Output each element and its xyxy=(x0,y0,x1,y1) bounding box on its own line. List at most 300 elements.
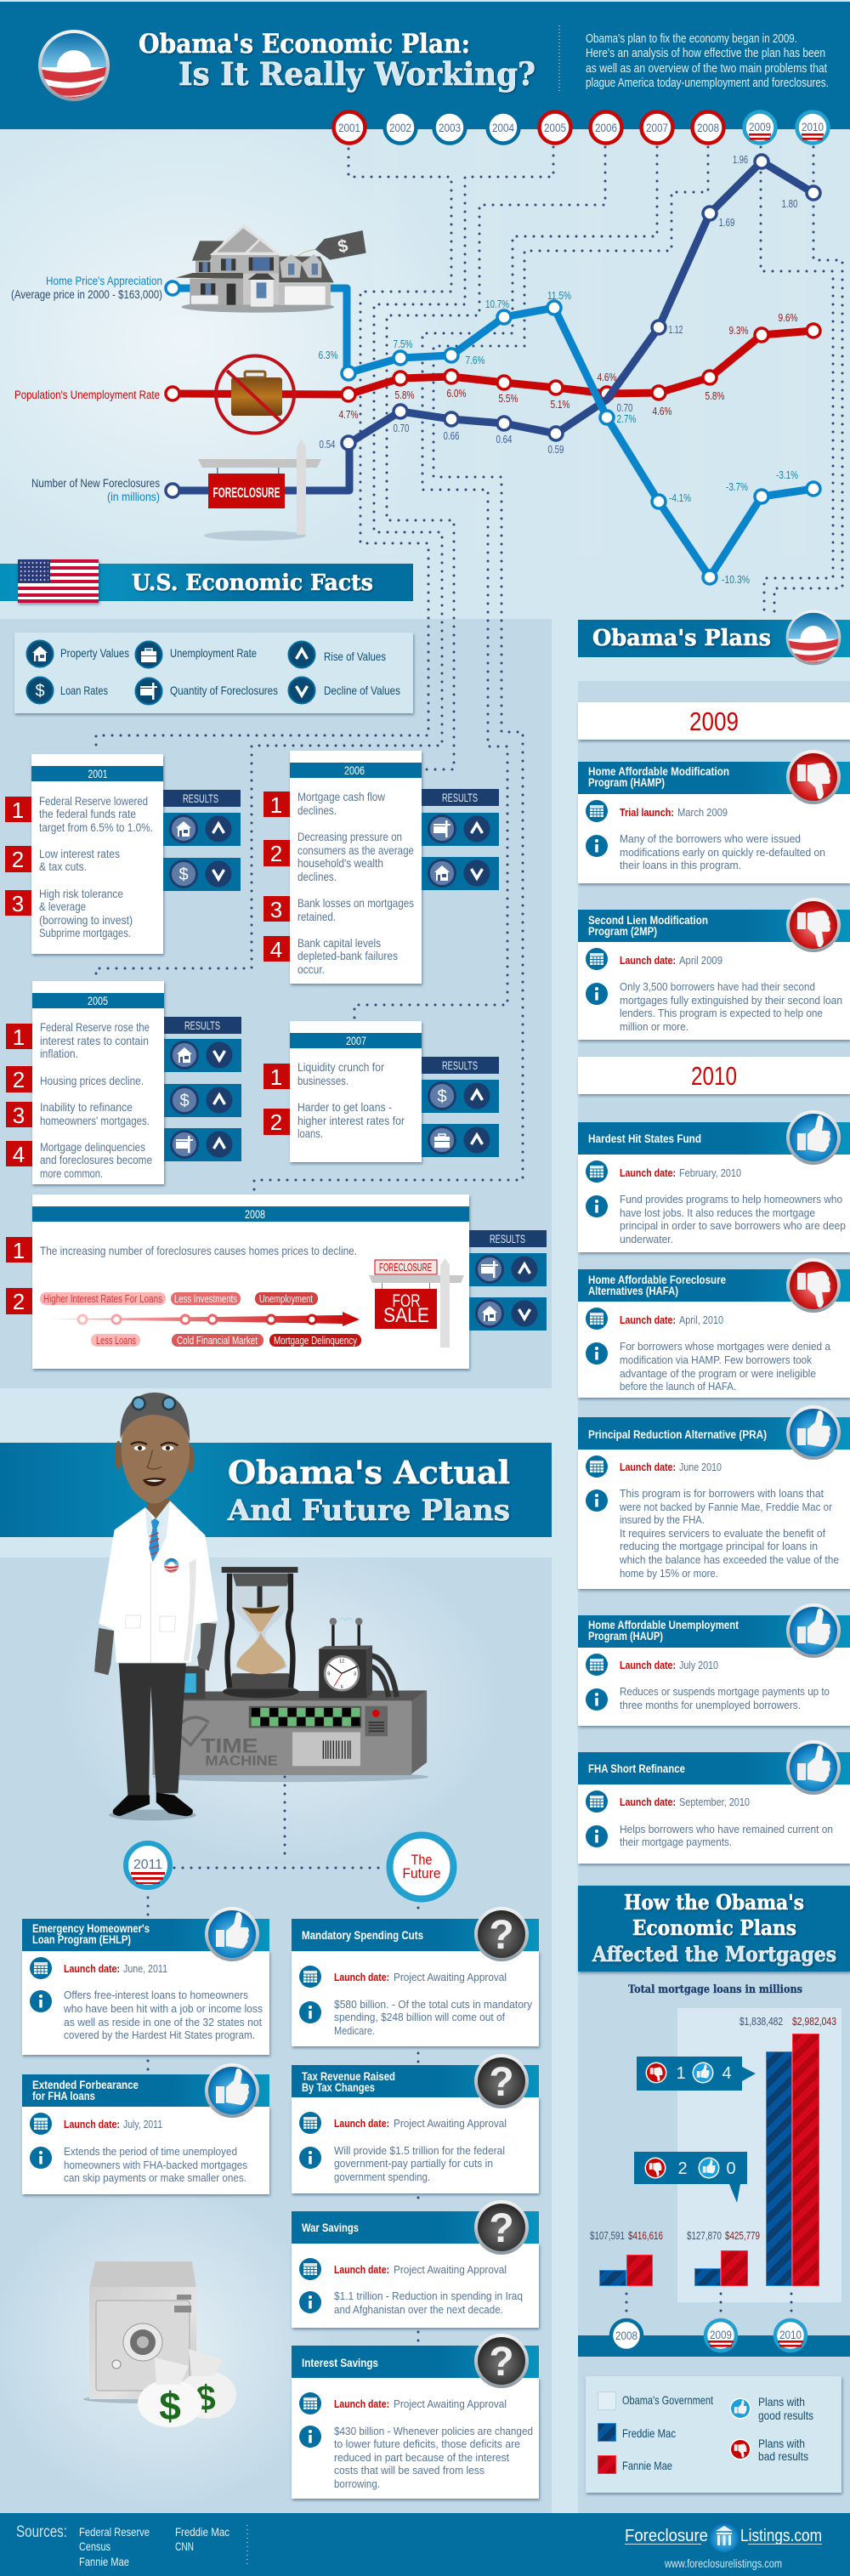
plan card: EHLP: Offers free-interest loans to homeowners xyxy=(64,1989,248,2001)
card: 2005: 4 xyxy=(13,1142,25,1167)
plan card: 2MP: million or more. xyxy=(620,1020,688,1033)
legend: mortgages chart xyxy=(586,2376,842,2493)
plan card: HAMP: Program (HAMP) xyxy=(588,776,665,789)
chart axis xyxy=(578,2320,850,2357)
card: 2006: household's wealth xyxy=(298,856,383,870)
illustration: foreclosure sign: FORECLOSURE xyxy=(212,485,280,501)
plan card: 2MP: Program (2MP) xyxy=(588,925,657,938)
heading: How the Obama's Economic Plans Affected the Mortgages: Economic Plans xyxy=(632,1915,796,1940)
results: 2008 xyxy=(469,1230,547,1331)
plan card: War Savings xyxy=(292,2200,539,2328)
plan card: HAUP: Program (HAUP) xyxy=(588,1630,663,1643)
callout: 2010 plan results: 1 xyxy=(676,2064,686,2083)
plan card: Mandatory Spending Cuts: Mandatory Spending Cuts xyxy=(302,1929,423,1942)
card: 2007: businesses. xyxy=(298,1074,348,1087)
bars: 2010: $1,838,482 xyxy=(740,2015,783,2028)
sources: Sources: xyxy=(16,2523,67,2541)
year markers: 2008 xyxy=(697,121,719,134)
card: 2006: Decreasing pressure on xyxy=(298,830,402,843)
plan card: War Savings: $1.1 trillion - Reduction in spending in Iraq xyxy=(334,2289,523,2302)
plan card: HAFA: Home Affordable Foreclosure xyxy=(588,1274,726,1286)
heading: Obama's Actual And Future Plans: And Future Plans xyxy=(227,1494,510,1528)
results: 2007 xyxy=(422,1057,499,1157)
icon: Obama logo xyxy=(38,30,110,101)
timeline pills: Unemployment xyxy=(259,1293,313,1305)
results: 2005 xyxy=(164,1017,241,1161)
plan card: HAMP: their loans in this program. xyxy=(620,859,741,871)
plan card: EHLP: June, 2011 xyxy=(123,1962,167,1975)
data labels: 1.69 xyxy=(719,217,735,229)
data labels: 7.5% xyxy=(393,338,413,350)
plan card: HAFA: For borrowers whose mortgages were denied a xyxy=(620,1340,831,1353)
data labels: -3.7% xyxy=(726,481,748,493)
sources: Fannie Mae xyxy=(79,2555,129,2568)
sources xyxy=(16,2523,247,2568)
icon: loan rates: $ xyxy=(35,682,45,701)
plan card: EHLP: Emergency Homeowner's xyxy=(32,1922,150,1935)
plan card: HAUP: Home Affordable Unemployment xyxy=(588,1619,739,1631)
callout: 2009 plan results xyxy=(634,2152,747,2203)
plan card: HAMP: Trial launch: xyxy=(620,806,674,819)
plan card: FHA Short Refinance: FHA Short Refinance xyxy=(588,1762,685,1775)
plan card: Hardest Hit States Fund: have lost jobs. It also reduces the mortgage xyxy=(620,1206,815,1219)
timeline pills xyxy=(40,1292,361,1347)
plan card: HAUP: three months for unemployed borrowers. xyxy=(620,1699,801,1711)
ForeclosureListings logo: Foreclosure xyxy=(625,2527,708,2545)
line chart xyxy=(166,154,820,586)
card: 2006: declines. xyxy=(298,803,337,817)
data labels: 4.6% xyxy=(597,372,617,383)
plan card: EHLP: who have been hit with a job or income loss xyxy=(63,2002,263,2015)
icon: unemployment xyxy=(136,641,162,668)
bars: 2008: $107,591 xyxy=(590,2229,625,2242)
heading: U.S. Economic Facts xyxy=(0,559,413,603)
plan card: EHLP: Launch date: xyxy=(64,1962,120,1975)
marker: 2011: 2011 xyxy=(133,1858,162,1872)
data labels: 4.7% xyxy=(338,409,359,421)
plan card: HAMP xyxy=(578,750,850,883)
timeline pills: Less Loans xyxy=(96,1335,136,1347)
plan card: HAUP: Launch date: xyxy=(620,1659,676,1671)
chart: total mortgage loans: Total mortgage loans in millions xyxy=(628,1983,802,1996)
plan card: Tax Revenue Raised: ? xyxy=(489,2060,514,2105)
plan card: PRA: This program is for borrowers with loans that xyxy=(620,1487,824,1500)
ForeclosureListings logo: www.foreclosurelistings.com xyxy=(664,2556,782,2570)
legend: economic facts xyxy=(14,633,413,713)
card: 2001: & tax cuts. xyxy=(39,860,87,873)
illustration: foreclosure sign xyxy=(198,439,321,541)
card: 2006: 3 xyxy=(270,897,282,922)
card: 2001: Low interest rates xyxy=(39,847,120,860)
data labels: 4.6% xyxy=(653,406,672,417)
plan card: HAMP: modifications early on quickly re-defaulted on xyxy=(620,846,825,859)
icon: for sale sign: FORECLOSURE xyxy=(379,1261,432,1274)
plan card: Hardest Hit States Fund: Launch date: xyxy=(620,1166,676,1179)
illustration: house with price tag xyxy=(176,224,366,313)
legend: mortgages chart: Fannie Mae xyxy=(622,2459,672,2472)
results: 2001 xyxy=(163,790,241,891)
plan card: HAUP: Reduces or suspends mortgage payments up to xyxy=(620,1685,830,1698)
year markers: 2001 xyxy=(338,121,360,134)
plan card: FHA Short Refinance: Launch date: xyxy=(620,1796,676,1808)
marker: The Future xyxy=(389,1835,454,1899)
legend: mortgages chart: good results xyxy=(758,2409,813,2422)
plan card: Hardest Hit States Fund: February, 2010 xyxy=(679,1166,741,1179)
data labels: 7.6% xyxy=(466,355,484,366)
plan card: Interest Savings: reduced in part because of the interest xyxy=(334,2451,509,2464)
card: 2006: declines. xyxy=(298,870,337,883)
dotted connectors: time machine to plan timelines xyxy=(148,1777,418,2342)
icon: loan rates xyxy=(27,677,53,704)
year markers: 2007 xyxy=(646,121,668,134)
results: 2005: RESULTS xyxy=(184,1018,220,1032)
data labels: 0.59 xyxy=(547,444,564,456)
icon: for sale sign xyxy=(369,1258,464,1348)
card: 2007: 2007 xyxy=(346,1034,366,1047)
clock box: 6 xyxy=(341,1685,343,1690)
plan card: EHLP xyxy=(22,1907,269,2055)
data labels: 0.70 xyxy=(393,423,410,434)
ForeclosureListings logo: Listings.com xyxy=(740,2527,822,2545)
marker: 2011 xyxy=(126,1843,170,1887)
card: 2001: Subprime mortgages. xyxy=(39,926,131,939)
data labels: 1.12 xyxy=(668,324,683,336)
card: 2005: 1 xyxy=(13,1024,25,1050)
plan card: HAFA: before the launch of HAFA. xyxy=(620,1380,736,1393)
data labels: 11.5% xyxy=(547,290,571,302)
chart axis: 2008 xyxy=(615,2329,638,2342)
results: 2007: $ xyxy=(437,1087,447,1106)
plan card: HAFA: Launch date: xyxy=(620,1314,676,1326)
data labels: 0.66 xyxy=(444,430,460,442)
plan card: Extended Forbearance: for FHA loans xyxy=(32,2090,95,2102)
data labels: 6.0% xyxy=(447,388,466,400)
plan card: HAUP: July 2010 xyxy=(679,1659,718,1671)
card: 2006: depleted-bank failures xyxy=(298,949,398,962)
clock box: 3 xyxy=(354,1671,356,1677)
card: 2008: The increasing number of foreclosures causes homes prices to decline. xyxy=(40,1244,357,1257)
plan card: Tax Revenue Raised: Launch date: xyxy=(334,2117,389,2130)
plan card: War Savings: and Afghanistan over the next decade. xyxy=(334,2303,503,2316)
shoes xyxy=(113,1795,150,1816)
plan card: EHLP: Loan Program (EHLP) xyxy=(32,1933,131,1946)
legend labels xyxy=(60,646,400,697)
results: 2006 xyxy=(422,789,499,890)
callout: 2009 plan results: 0 xyxy=(726,2159,736,2178)
card: 2007: loans. xyxy=(298,1126,323,1140)
plan card: Hardest Hit States Fund: underwater. xyxy=(620,1233,673,1245)
plan card: Mandatory Spending Cuts: $580 billion. - Of the total cuts in mandatory xyxy=(334,1998,532,2011)
gloves xyxy=(94,1628,114,1675)
heading: Obama's Actual And Future Plans xyxy=(0,1443,552,1537)
bars: 2009: $425,779 xyxy=(725,2229,760,2242)
legend: mortgages chart: bad results xyxy=(758,2449,808,2463)
plan card: 2MP: Launch date: xyxy=(620,954,676,967)
card: 2005: 2005 xyxy=(88,994,108,1007)
card: 2005: Mortgage delinquencies xyxy=(40,1140,145,1154)
card: 2005: Federal Reserve rose the xyxy=(40,1020,150,1034)
legend labels: Property Values xyxy=(60,646,129,660)
icon: property values xyxy=(27,641,53,667)
series: unemployment rate xyxy=(166,324,820,401)
legend labels: Loan Rates xyxy=(60,684,108,697)
data labels: 9.6% xyxy=(779,312,797,324)
plan card: EHLP: covered by the Hardest Hit States program. xyxy=(64,2028,255,2041)
data labels: 10.7% xyxy=(485,298,509,310)
plan card: Extended Forbearance: can skip payments or make smaller ones. xyxy=(64,2171,246,2184)
card: 2006: Bank capital levels xyxy=(298,936,381,950)
plan card: War Savings: War Savings xyxy=(302,2221,359,2234)
plan card: Extended Forbearance: Extended Forbearance xyxy=(32,2079,139,2091)
plan card: War Savings: Project Awaiting Approval xyxy=(394,2263,507,2276)
card: 2006: Bank losses on mortgages xyxy=(298,896,414,910)
year banner: 2009: 2009 xyxy=(689,706,739,736)
plan card: Interest Savings xyxy=(292,2334,539,2499)
card: 2006: 2006 xyxy=(344,763,365,777)
plan card: Tax Revenue Raised: government spending. xyxy=(334,2170,430,2183)
legend labels: Decline of Values xyxy=(324,684,400,697)
clock box: 9 xyxy=(327,1671,330,1677)
machine base xyxy=(152,1690,427,1775)
results: 2001: RESULTS xyxy=(183,792,218,805)
card: 2008: 2 xyxy=(13,1289,25,1314)
legend labels: Unemployment Rate xyxy=(170,646,257,660)
icon: for sale sign: FOR xyxy=(393,1291,420,1311)
card: 2007: Liquidity crunch for xyxy=(298,1060,384,1074)
plan card: Tax Revenue Raised: government-pay partially for cuts in xyxy=(334,2157,493,2170)
data labels: 6.3% xyxy=(318,349,338,361)
plan card: Tax Revenue Raised: Tax Revenue Raised xyxy=(302,2070,395,2083)
footer xyxy=(0,2513,850,2576)
data labels: 5.8% xyxy=(394,389,415,401)
card: 2006: 1 xyxy=(270,792,282,818)
card: 2005: Inability to refinance xyxy=(40,1100,133,1114)
head xyxy=(115,1393,195,1504)
timeline arrow xyxy=(49,1312,360,1326)
data labels: 2.7% xyxy=(617,413,636,425)
card: 2006: 4 xyxy=(270,937,282,962)
card: 2005: more common. xyxy=(40,1166,103,1180)
plan card: FHA Short Refinance xyxy=(578,1740,850,1864)
heading: How the Obama's Economic Plans Affected the Mortgages: How the Obama's xyxy=(624,1890,804,1915)
data labels: -3.1% xyxy=(776,469,798,481)
results: 2008: RESULTS xyxy=(490,1232,525,1245)
plan card: FHA Short Refinance: Helps borrowers who have remained current on xyxy=(620,1823,833,1836)
data labels: 5.1% xyxy=(551,399,570,411)
clock box xyxy=(319,1618,397,1698)
series labels: (Average price in 2000 - $163,000) xyxy=(11,287,162,301)
series labels: Number of New Foreclosures xyxy=(31,476,160,490)
series labels: Population's Unemployment Rate xyxy=(14,388,160,401)
card: 2006: 2 xyxy=(270,841,282,866)
heading: U.S. Economic Facts: U.S. Economic Facts xyxy=(132,570,373,596)
card: 2008: 2008 xyxy=(245,1207,265,1221)
plan card: Extended Forbearance: Extends the period of time unemployed xyxy=(64,2145,237,2158)
plan card: Mandatory Spending Cuts: Medicare. xyxy=(334,2024,375,2037)
plan card: Tax Revenue Raised: By Tax Changes xyxy=(302,2081,375,2094)
icon: foreclosures xyxy=(136,678,162,704)
plan card: HAFA xyxy=(578,1258,850,1398)
card: 2001: 1 xyxy=(12,797,24,823)
data labels: 9.3% xyxy=(729,325,748,337)
chart axis: 2010 xyxy=(779,2328,802,2341)
results: 2006: RESULTS xyxy=(442,791,478,804)
year markers xyxy=(333,112,828,143)
card: 2001: 2 xyxy=(12,847,24,872)
plan card: Tax Revenue Raised: Project Awaiting Approval xyxy=(394,2117,507,2130)
intro text xyxy=(586,31,829,90)
card: 2005: Housing prices decline. xyxy=(40,1074,144,1087)
plan card: 2MP: Second Lien Modification xyxy=(588,914,708,927)
illustration: house with price tag: $ xyxy=(336,235,350,257)
data labels: 0.64 xyxy=(496,434,513,445)
plan card: Interest Savings: Launch date: xyxy=(334,2397,389,2410)
series: new foreclosures xyxy=(166,155,820,497)
year banner: 2009 xyxy=(578,702,850,740)
results: 2007: RESULTS xyxy=(442,1058,478,1072)
plan card: Extended Forbearance xyxy=(22,2063,269,2194)
plan card: Mandatory Spending Cuts xyxy=(292,1907,539,2046)
lab coat xyxy=(99,1501,218,1662)
plan card: 2MP xyxy=(578,898,850,1040)
plan card: PRA: June 2010 xyxy=(679,1461,722,1473)
plan card: 2MP: April 2009 xyxy=(679,954,722,967)
plan card: Extended Forbearance: Launch date: xyxy=(64,2118,120,2131)
card: 2001: (borrowing to invest) xyxy=(39,913,133,927)
card: 2007: 1 xyxy=(270,1064,282,1090)
callout: 2009 plan results: 2 xyxy=(677,2159,688,2178)
card: 2006: Mortgage cash flow xyxy=(298,790,386,803)
plan card: Interest Savings: costs that will be saved from less xyxy=(334,2464,484,2477)
data labels: 1.96 xyxy=(733,154,748,166)
plan card: Interest Savings: $430 billion - Whenever policies are changed xyxy=(334,2425,533,2437)
plan card: Interest Savings: Interest Savings xyxy=(302,2357,378,2369)
card: 2001: High risk tolerance xyxy=(39,887,123,900)
trousers xyxy=(119,1663,186,1795)
results: 2005: $ xyxy=(179,1092,190,1110)
title xyxy=(139,29,536,93)
card: 2005 xyxy=(6,981,164,1184)
legend labels: Quantity of Foreclosures xyxy=(170,684,278,697)
icon: for sale sign: SALE xyxy=(383,1304,429,1327)
illustration: safe with money bags xyxy=(83,2261,236,2428)
plan card: War Savings: Launch date: xyxy=(334,2263,389,2276)
bars: 2010: $2,982,043 xyxy=(792,2015,836,2028)
series labels: Home Price's Appreciation xyxy=(46,274,162,287)
data labels: -4.1% xyxy=(669,492,691,504)
plan card: PRA: reducing the mortgage principal for loans in xyxy=(620,1540,818,1552)
data labels xyxy=(318,154,798,586)
heading: How the Obama's Economic Plans Affected the Mortgages xyxy=(578,1886,850,1972)
timeline pills: Higher Interest Rates For Loans xyxy=(43,1293,162,1305)
data labels: -10.3% xyxy=(722,574,750,586)
card: 2007: Harder to get loans - xyxy=(298,1100,392,1114)
year markers: 2009 xyxy=(749,120,771,133)
card: 2007 xyxy=(264,1021,422,1162)
callout: 2010 plan results xyxy=(637,2057,756,2091)
plan card: Mandatory Spending Cuts: ? xyxy=(489,1913,514,1958)
dotted connectors from years to fact cards xyxy=(96,147,842,1193)
card: 2001: the federal funds rate xyxy=(39,807,136,820)
plan card: 2MP: lenders. This program is expected to help one xyxy=(620,1007,823,1019)
illustration: no-work briefcase xyxy=(216,355,294,434)
icon: rise xyxy=(289,641,314,668)
ForeclosureListings logo xyxy=(625,2522,822,2570)
bars: 2009: $127,870 xyxy=(687,2229,722,2242)
machine base: MACHINE xyxy=(205,1753,278,1768)
legend: mortgages chart: Plans with xyxy=(758,2437,805,2450)
card: 2005: 3 xyxy=(13,1103,25,1128)
data labels: 0.70 xyxy=(617,402,633,414)
data labels: 5.8% xyxy=(706,390,724,402)
icon: decline xyxy=(289,677,314,704)
plan card: Hardest Hit States Fund: Hardest Hit States Fund xyxy=(588,1132,701,1145)
plan card: Interest Savings: ? xyxy=(489,2340,514,2385)
series labels xyxy=(11,274,162,503)
plan card: Mandatory Spending Cuts: Launch date: xyxy=(334,1971,389,1983)
data labels: 0.54 xyxy=(320,439,336,451)
plan card: PRA: Launch date: xyxy=(620,1461,676,1473)
illustration: Obama in lab coat xyxy=(94,1393,218,1820)
marker: The Future: The xyxy=(411,1852,432,1868)
plan card: PRA xyxy=(578,1405,850,1589)
monitor xyxy=(178,1666,205,1699)
bars: 2010 xyxy=(740,2015,836,2285)
sources: Freddie Mac xyxy=(175,2525,230,2539)
machine base: TIME xyxy=(201,1734,258,1757)
neck xyxy=(147,1499,171,1519)
card: 2005: homeowners' mortgages. xyxy=(40,1114,150,1127)
legend: mortgages chart: Freddie Mac xyxy=(622,2426,676,2440)
year markers: 2006 xyxy=(595,121,617,134)
bars: 2009 xyxy=(687,2229,760,2285)
card: 2005: inflation. xyxy=(40,1047,78,1060)
year banner: 2010 xyxy=(578,1057,850,1094)
chart axis: 2009 xyxy=(710,2328,732,2341)
plan card: Hardest Hit States Fund xyxy=(578,1110,850,1252)
series: home price appreciation xyxy=(166,281,820,584)
chart: total mortgage loans xyxy=(578,1983,850,2357)
plan card: Interest Savings: Project Awaiting Approval xyxy=(394,2397,507,2410)
plan card: PRA: Principal Reduction Alternative (PRA) xyxy=(588,1428,767,1441)
card: 2005: 2 xyxy=(13,1067,25,1092)
plan card: FHA Short Refinance: their mortgage payments. xyxy=(620,1836,732,1848)
bars: 2008 xyxy=(590,2229,663,2285)
bars: 2008: $416,616 xyxy=(628,2229,663,2242)
card: 2006 xyxy=(264,751,422,984)
plan card: HAMP: Home Affordable Modification xyxy=(588,765,729,778)
data labels: 1.80 xyxy=(782,198,798,210)
marker: The Future: Future xyxy=(403,1865,440,1881)
plan card: HAUP xyxy=(578,1603,850,1726)
money bags: $ xyxy=(159,2384,181,2428)
heading: Obama's Plans: Obama's Plans xyxy=(592,626,771,651)
plan card: Extended Forbearance: homeowners with FHA-backed mortgages xyxy=(64,2159,247,2171)
heading: Obama's Plans xyxy=(578,610,850,666)
card: 2007: 2 xyxy=(270,1109,282,1135)
sources: CNN xyxy=(175,2539,194,2553)
plan card: Interest Savings: to lower future deficits, those deficits are xyxy=(334,2437,520,2450)
sources: Census xyxy=(79,2539,110,2553)
heading: Obama's Actual And Future Plans: Obama's Actual xyxy=(228,1454,510,1491)
results: 2001: $ xyxy=(178,865,189,884)
card: 2001: target from 6.5% to 1.0%. xyxy=(39,820,153,834)
Obama's government period xyxy=(677,2008,842,2302)
card: 2008 xyxy=(6,1194,469,1369)
series labels: (in millions) xyxy=(107,490,160,503)
plan card: EHLP: as well as reside in one of the 32 states not xyxy=(64,2016,262,2028)
year markers: 2003 xyxy=(439,121,461,134)
